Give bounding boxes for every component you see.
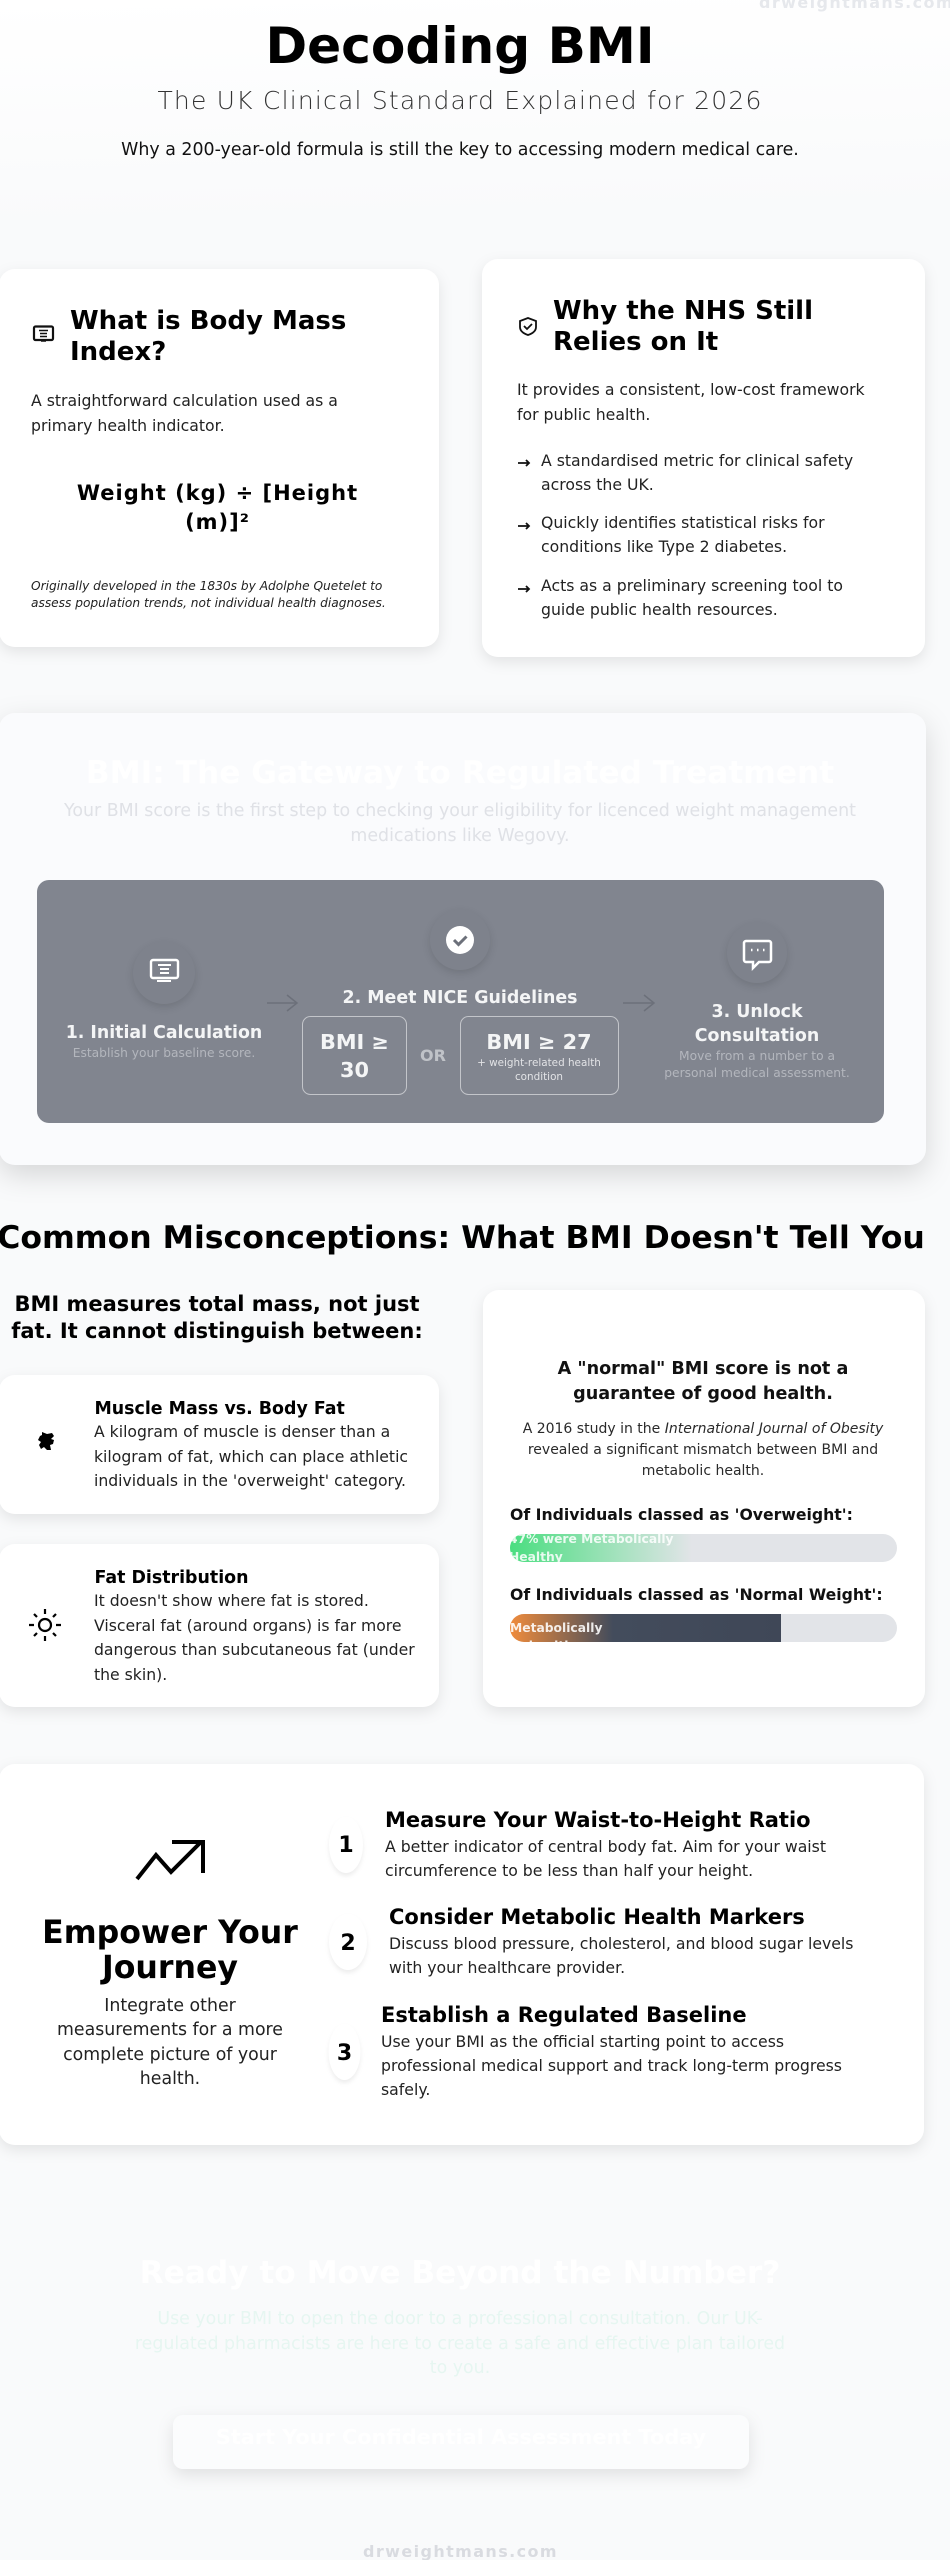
step 2: metabolic	[329, 1905, 853, 1977]
bar: overweight: 47% were Metabolically	[509, 1532, 674, 1546]
text: study: A 2016 study in the International Journal of Obesity	[523, 1421, 883, 1437]
heading: normal BMI: guarantee of good health.	[573, 1384, 833, 1404]
step 3: baseline: professional medical support and track long-term progress	[381, 2056, 842, 2075]
panel: fat distribution	[0, 1544, 439, 1707]
text: empower: Integrate other	[104, 1996, 237, 2016]
CTA text: regulated pharmacists are here to create a safe and effective plan tailored	[135, 2334, 785, 2354]
bar: overweight: Healthy	[509, 1550, 563, 1564]
text: study: metabolic health.	[642, 1463, 764, 1479]
step 1: waist	[329, 1808, 826, 1880]
step 3: baseline	[328, 2003, 842, 2099]
label 3: 3. Unlock	[711, 1002, 803, 1022]
CTA text: to you.	[430, 2358, 490, 2378]
step 3	[664, 923, 850, 1080]
heading: empower: Empower Your	[42, 1915, 298, 1951]
heading: empower: Journey	[100, 1950, 238, 1986]
panel: what is BMI	[0, 269, 439, 647]
subtitle: The UK Clinical Standard Explained for 2026	[157, 86, 763, 115]
text: muscle: kilogram of fat, which can place athletic	[94, 1447, 408, 1466]
text: study: revealed a significant mismatch between BMI and	[528, 1442, 878, 1458]
heading: fat distribution: Fat Distribution	[94, 1568, 248, 1588]
desc 3: Move from a number to a	[679, 1049, 835, 1063]
text: framework: It provides a consistent, low-cost framework	[517, 380, 866, 399]
step 2: metabolic: 2	[340, 1931, 356, 1956]
text: fat distribution: dangerous than subcutaneous fat (under	[94, 1640, 415, 1659]
text: fat distribution: the skin).	[94, 1665, 167, 1684]
panel: empower	[0, 1764, 924, 2145]
panel: gateway	[0, 713, 926, 1165]
icon: calculator white	[151, 960, 178, 981]
icon: muscle	[38, 1432, 54, 1450]
box: BMI 27: + weight-related health	[477, 1057, 601, 1069]
icon: shield	[520, 318, 536, 335]
formula: (m)]²	[185, 510, 250, 534]
step 1: waist: circumference to be less than half your height.	[385, 1861, 753, 1880]
panel: why the NHS	[482, 259, 925, 657]
step 2: metabolic: Discuss blood pressure, cholesterol, and blood sugar levels	[389, 1934, 853, 1953]
label 2: 2. Meet NICE Guidelines	[342, 988, 578, 1008]
bar: normal weight	[510, 1614, 897, 1642]
bar: normal weight: Metabolically	[510, 1621, 602, 1635]
OR: OR	[420, 1046, 446, 1065]
label: normal weight: Of Individuals classed as 'Normal Weight':	[510, 1585, 883, 1604]
note: Originally developed in the 1830s by Adolphe Quetelet to	[31, 579, 382, 593]
dark flow panel	[37, 880, 884, 1123]
text: definition: A straightforward calculation used as a	[31, 391, 338, 410]
bullet list: Quickly identifies statistical risks for	[541, 513, 825, 532]
bar: normal weight: Unhealthy	[510, 1639, 581, 1653]
icon: chat	[744, 941, 771, 968]
desc 1: Establish your baseline score.	[73, 1046, 255, 1060]
formula: Weight (kg) ÷ [Height	[77, 481, 358, 505]
bullet list: guide public health resources.	[541, 600, 778, 619]
bullet list: Acts as a preliminary screening tool to	[541, 576, 843, 595]
heading: gateway: BMI: The Gateway to Regulated Treatment	[86, 755, 834, 791]
bar: overweight	[510, 1534, 897, 1562]
heading: why the NHS: Relies on It	[553, 327, 718, 357]
text: framework: for public health.	[517, 405, 650, 424]
icon: calculator screen	[34, 326, 53, 341]
step 3: baseline: Establish a Regulated Baseline	[381, 2003, 747, 2027]
arrow 2	[623, 995, 654, 1011]
text: empower: complete picture of your	[63, 2045, 278, 2065]
text: muscle: A kilogram of muscle is denser than a	[94, 1422, 390, 1441]
subtitle: gateway: medications like Wegovy.	[350, 826, 570, 846]
desc 3: personal medical assessment.	[664, 1066, 850, 1080]
step 1: waist: A better indicator of central body fat. Aim for your waist	[385, 1837, 826, 1856]
step 2	[302, 910, 618, 1094]
step 2: metabolic: Consider Metabolic Health Markers	[389, 1905, 805, 1929]
icon: trend arrow	[137, 1842, 203, 1879]
heading: what is BMI: What is Body Mass	[70, 306, 346, 336]
text: definition: primary health indicator.	[31, 416, 225, 435]
label 1: 1. Initial Calculation	[66, 1023, 262, 1043]
title: Decoding BMI	[265, 16, 655, 75]
heading: what is BMI: Index?	[70, 337, 166, 367]
text: fat distribution: It doesn't show where fat is stored.	[94, 1591, 369, 1610]
text: empower: health.	[140, 2069, 200, 2089]
step 3: baseline: Use your BMI as the official starting point to access	[381, 2032, 784, 2051]
box: BMI 30: BMI ≥	[320, 1030, 389, 1054]
note: assess population trends, not individual health diagnoses.	[31, 596, 386, 610]
box: BMI 27	[460, 1016, 618, 1094]
subheading: total mass: fat. It cannot distinguish between:	[11, 1319, 423, 1343]
text: fat distribution: Visceral fat (around organs) is far more	[94, 1616, 402, 1635]
icon: sun	[29, 1609, 61, 1641]
box: BMI 30	[302, 1016, 406, 1094]
heading: normal BMI: A "normal" BMI score is not a	[558, 1359, 848, 1379]
arrow 1	[267, 995, 297, 1011]
box: BMI 27: condition	[515, 1071, 563, 1083]
bullet list: A standardised metric for clinical safety	[541, 451, 853, 470]
panel: muscle vs fat	[0, 1375, 439, 1514]
icon: check	[446, 926, 474, 954]
step 1	[66, 942, 262, 1060]
step 2: metabolic: with your healthcare provider.	[389, 1958, 625, 1977]
bullet list: conditions like Type 2 diabetes.	[541, 537, 787, 556]
CTA text: Use your BMI to open the door to a professional consultation. Our UK-	[157, 2309, 763, 2329]
CTA button: Start Your Confidential Assessment Today	[216, 2425, 707, 2449]
step 3: baseline: safely.	[381, 2080, 430, 2099]
text: empower: measurements for a more	[57, 2020, 283, 2040]
box: BMI 27: BMI ≥ 27	[486, 1030, 592, 1054]
bar: normal weight: 30% were	[510, 1603, 578, 1617]
step 1: waist: 1	[338, 1833, 354, 1858]
step 3: baseline: 3	[337, 2041, 352, 2066]
tagline: Why a 200-year-old formula is still the key to accessing modern medical care.	[121, 140, 799, 160]
bullet list: across the UK.	[541, 475, 654, 494]
text: muscle: individuals in the 'overweight' category.	[94, 1471, 406, 1490]
label 3: Consultation	[695, 1026, 819, 1046]
label: overweight: Of Individuals classed as 'Overweight':	[510, 1505, 853, 1524]
subtitle: gateway: Your BMI score is the first step to checking your eligibility for licenced weight management	[63, 801, 856, 821]
CTA heading: Ready to Move Beyond the Number?	[140, 2255, 780, 2291]
bullet arrows	[518, 460, 529, 592]
panel: normal BMI chart	[483, 1290, 925, 1707]
heading: misconceptions: Common Misconceptions: What BMI Doesn't Tell You	[0, 1220, 925, 1256]
step 1: waist: Measure Your Waist-to-Height Ratio	[385, 1808, 811, 1832]
CTA button	[173, 2415, 749, 2469]
heading: why the NHS: Why the NHS Still	[553, 296, 813, 326]
box: BMI 30: 30	[340, 1058, 369, 1082]
heading: muscle: Muscle Mass vs. Body Fat	[94, 1399, 345, 1419]
subheading: total mass: BMI measures total mass, not just	[14, 1292, 420, 1316]
